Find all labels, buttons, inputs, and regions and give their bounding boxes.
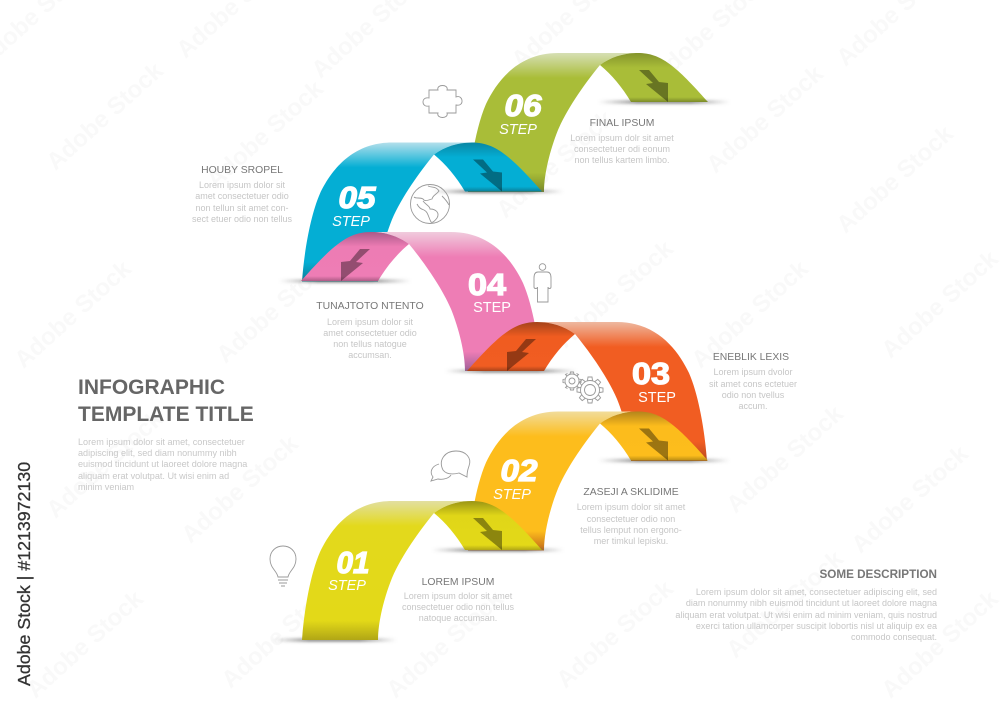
text: eneblik lexis <box>709 352 797 411</box>
text: final ipsum: consectetuer odi eonum <box>574 144 670 154</box>
text: zaseji a sklidime: mer timkul lepisku. <box>594 536 668 546</box>
title description: Lorem ipsum dolor sit amet, consectetuer <box>78 437 245 447</box>
text: some description <box>675 568 937 642</box>
text: lorem ipsum <box>402 577 515 623</box>
step label 01: 01 <box>336 545 370 580</box>
text: lorem ipsum: Lorem ipsum dolor sit amet <box>404 591 513 601</box>
text: final ipsum: FINAL IPSUM <box>590 118 654 129</box>
watermark: Adobe Stock <box>211 250 339 369</box>
step label 03: 03 <box>632 356 670 391</box>
icon: globe <box>410 184 450 224</box>
step label 02: STEP <box>493 487 531 503</box>
text: final ipsum <box>570 118 674 165</box>
watermark: Adobe Stock <box>201 75 329 194</box>
title description <box>78 437 248 492</box>
watermark: Adobe Stock <box>176 430 304 549</box>
text: eneblik lexis: Lorem ipsum dvolor <box>713 367 793 377</box>
step label 06 <box>499 88 542 138</box>
watermark: Adobe Stock <box>846 440 974 559</box>
text: lorem ipsum: LOREM IPSUM <box>422 577 494 588</box>
step label 03 <box>632 356 676 406</box>
text: houby sropel: HOUBY SROPEL <box>201 165 283 176</box>
text: houby sropel: Lorem ipsum dolor sit <box>199 180 286 190</box>
step label 01: STEP <box>328 578 366 594</box>
watermark: Adobe Stock <box>701 60 829 179</box>
step label 03: STEP <box>638 390 676 406</box>
text: tunajtoto ntento: Lorem ipsum dolor sit <box>327 317 414 327</box>
title description: adipiscing elit, sed diam nonummy nibh <box>78 448 237 458</box>
step label 04: STEP <box>473 300 511 316</box>
arch step 01 <box>272 501 564 642</box>
text: tunajtoto ntento: TUNAJTOTO NTENTO <box>316 301 424 312</box>
watermark: Adobe Stock <box>9 255 137 374</box>
step label 05: 05 <box>338 180 376 215</box>
watermark: Adobe Stock <box>686 255 814 374</box>
text: lorem ipsum: consectetuer odio non tellus <box>402 602 515 612</box>
watermark: Adobe Stock <box>491 105 619 224</box>
arch step 06 <box>468 53 730 192</box>
text: zaseji a sklidime: consectetuer odio non <box>587 514 675 524</box>
watermark: Adobe Stock <box>41 57 169 176</box>
step label 06: STEP <box>499 122 537 138</box>
text: some description: diam nonummy nibh euismod tincidunt ut laoreet dolore magna <box>686 598 937 608</box>
step label 04: 04 <box>468 267 507 302</box>
icon: light bulb <box>270 546 296 586</box>
text: eneblik lexis: ENEBLIK LEXIS <box>713 352 789 363</box>
text: eneblik lexis: accum. <box>738 401 768 411</box>
step label 06: 06 <box>504 88 542 123</box>
text: houby sropel <box>192 165 293 224</box>
text: tunajtoto ntento: non tellus natogue <box>333 339 407 349</box>
text: some description: exerci tation ullamcorper suscipit lobortis nisl ut aliquip ex ea <box>696 621 937 631</box>
text: eneblik lexis: odio non tvellus <box>722 390 785 400</box>
text: tunajtoto ntento: accumsan. <box>348 350 392 360</box>
watermark: Adobe Stock <box>21 585 149 701</box>
watermark: Adobe Stock <box>551 575 679 694</box>
text: houby sropel: sect etuer odio non tellus <box>192 214 293 224</box>
step label 02 <box>493 453 538 503</box>
watermark: Adobe Stock <box>216 575 344 694</box>
text: some description: aliquam erat volutpat. Ut wisi enim ad minim veniam, quis nostrud <box>675 610 937 620</box>
title description: aliquam erat volutpat. Ut wisi enim ad <box>78 471 229 481</box>
text: final ipsum: Lorem ipsum dolr sit amet <box>570 133 674 143</box>
arch step 05 <box>302 142 564 282</box>
text: some description: commodo consequat. <box>851 632 937 642</box>
step label 04 <box>468 267 511 316</box>
text: some description: Lorem ipsum dolor sit amet, consectetuer adipiscing elit, sed <box>696 587 937 597</box>
watermark: Adobe Stock <box>721 400 849 519</box>
title description: euismod tincidunt ut laoreet dolore magna <box>78 459 248 469</box>
icon: gears <box>563 372 603 403</box>
watermark: Adobe Stock <box>551 235 679 354</box>
arch step 02 <box>468 412 730 550</box>
watermark: Adobe Stock <box>831 120 959 239</box>
text: houby sropel: amet consectetuer odio <box>195 191 289 201</box>
title description: minim veniam <box>78 482 134 492</box>
arch step 04 <box>279 232 541 371</box>
step label 02: 02 <box>500 453 538 488</box>
title: INFOGRAPHIC <box>78 376 225 399</box>
icon: puzzle piece <box>423 86 462 118</box>
step label 05: STEP <box>332 214 370 230</box>
text: eneblik lexis: sit amet cons ectetuer <box>709 379 797 389</box>
watermark: Adobe Stock <box>381 585 509 701</box>
title <box>78 376 254 426</box>
title: TEMPLATE TITLE <box>78 403 254 426</box>
icon: person <box>534 264 551 302</box>
icon: speech bubbles <box>431 451 470 481</box>
step label 01 <box>328 545 370 594</box>
arch step 03 <box>445 322 707 461</box>
text: some description: SOME DESCRIPTION <box>819 568 937 581</box>
text: zaseji a sklidime <box>577 487 686 546</box>
watermark: Adobe Stock <box>721 545 849 664</box>
text: houby sropel: non tellun sit amet con- <box>195 203 289 213</box>
watermark: Adobe Stock <box>876 245 1000 364</box>
text: zaseji a sklidime: tellus lemput non ergono- <box>580 525 682 535</box>
text: tunajtoto ntento: amet consectetuer odio <box>323 328 417 338</box>
text: zaseji a sklidime: Lorem ipsum dolor sit amet <box>577 502 686 512</box>
text: tunajtoto ntento <box>316 301 424 360</box>
text: zaseji a sklidime: ZASEJI A SKLIDIME <box>583 487 679 498</box>
stock credit: Adobe Stock | #1213972130 <box>14 462 34 686</box>
watermark: Adobe Stock <box>41 405 169 524</box>
text: lorem ipsum: natoque accumsan. <box>419 613 497 623</box>
step label 05 <box>332 180 376 230</box>
text: final ipsum: non tellus kartem limbo. <box>574 155 670 165</box>
